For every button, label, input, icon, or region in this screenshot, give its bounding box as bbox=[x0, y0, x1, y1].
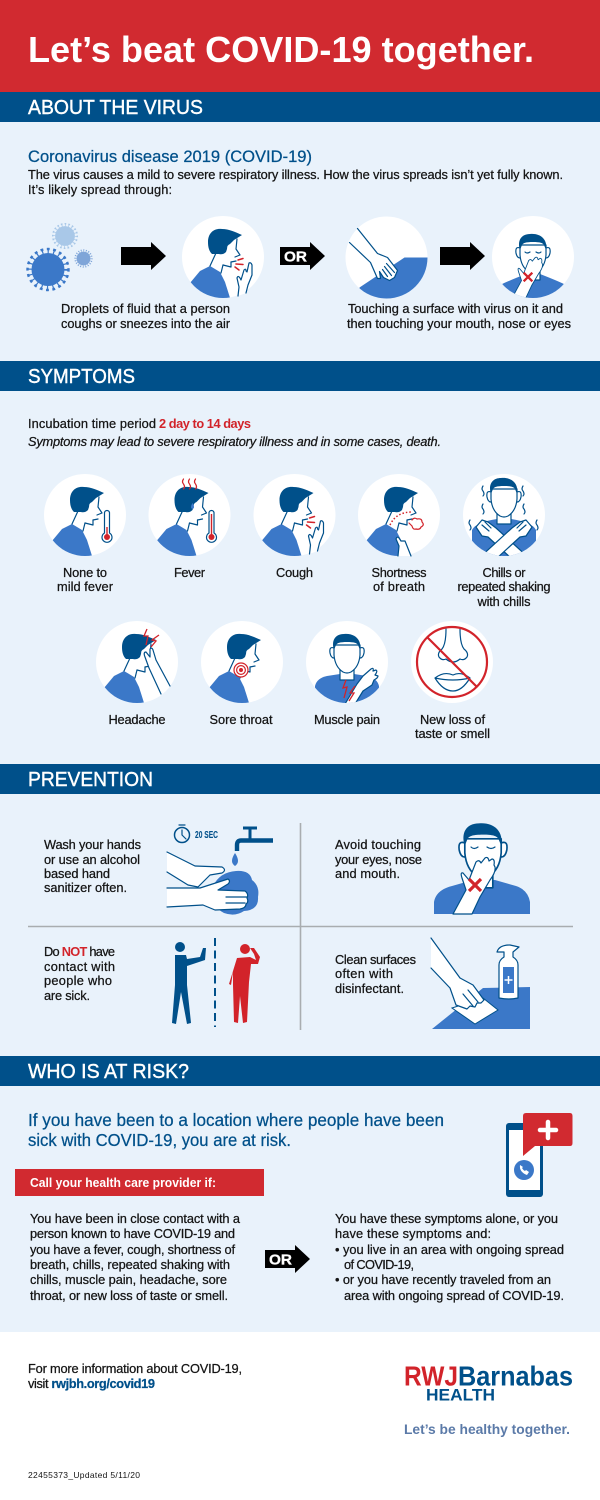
label: new loss of taste or smell bbox=[415, 712, 490, 741]
label: chills: repeated shaking bbox=[458, 579, 550, 594]
text: no contact: people who bbox=[44, 973, 112, 988]
caption: touching: then touching your mouth, nose or eyes bbox=[347, 316, 571, 331]
icon: headache bbox=[96, 621, 178, 706]
label: cough: Cough bbox=[276, 565, 313, 580]
label: new loss of taste or smell: taste or smell bbox=[415, 726, 490, 741]
callout: call your provider bbox=[15, 1169, 264, 1196]
arrow: OR: OR bbox=[269, 1252, 292, 1268]
icon: sick person bbox=[229, 944, 260, 1023]
label: sore throat: Sore throat bbox=[210, 712, 273, 727]
section header: who is at risk: WHO IS AT RISK? bbox=[28, 1061, 189, 1083]
text: clean surfaces: often with bbox=[335, 966, 393, 981]
icon: no taste or smell bbox=[411, 621, 493, 703]
title banner bbox=[0, 0, 600, 92]
section header: symptoms: SYMPTOMS bbox=[28, 366, 135, 388]
incubation period: Incubation time period bbox=[28, 416, 156, 431]
icon: cough bbox=[254, 474, 336, 559]
text: close contact bbox=[30, 1211, 241, 1303]
label: new loss of taste or smell: New loss of bbox=[420, 712, 485, 727]
logo: RWJBarnabas Health: RWJ bbox=[404, 1360, 458, 1392]
icon: spray bottle bbox=[497, 945, 519, 999]
icon: shortness of breath bbox=[358, 474, 440, 559]
label: fever: Fever bbox=[174, 565, 206, 580]
icon: washing hands bbox=[167, 825, 273, 915]
caption: droplets: coughs or sneezes into the air bbox=[61, 316, 231, 331]
icon: phone call bbox=[506, 1113, 572, 1197]
text: wash hands: or use an alcohol bbox=[44, 852, 140, 867]
label: none to mild fever: None to bbox=[63, 565, 107, 580]
title banner: Let’s beat COVID-19 together. bbox=[28, 29, 534, 70]
tagline: Let’s be healthy together. bbox=[404, 1421, 570, 1437]
icon: none to mild fever bbox=[44, 474, 126, 559]
label: shortness of breath: Shortness bbox=[372, 565, 426, 580]
text: avoid touching bbox=[335, 837, 422, 881]
text: symptoms and location: • or you have recently traveled from an bbox=[335, 1272, 551, 1287]
text: no contact bbox=[44, 944, 115, 1003]
text: symptoms and location: • you live in an area with ongoing spread bbox=[335, 1242, 564, 1257]
icon: sore throat bbox=[201, 621, 283, 706]
panel: about the virus bbox=[28, 148, 574, 331]
text: avoid touching: and mouth. bbox=[335, 866, 400, 881]
subheading: disease name: Coronavirus disease 2019 (COVID-19) bbox=[28, 148, 312, 166]
risk statement: sick with COVID-19, you are at risk. bbox=[28, 1130, 291, 1150]
arrow: OR bbox=[280, 242, 325, 270]
section header: prevention: PREVENTION bbox=[28, 769, 153, 791]
label: chills: with chills bbox=[476, 594, 530, 609]
label: none to mild fever: mild fever bbox=[57, 579, 114, 594]
text: close contact: person known to have COVID-19 and bbox=[30, 1226, 235, 1241]
text: clean surfaces: disinfectant. bbox=[335, 981, 404, 996]
section header: about the virus: ABOUT THE VIRUS bbox=[28, 97, 203, 119]
incubation period: 2 day to 14 days bbox=[159, 416, 251, 431]
text: clean surfaces: Clean surfaces bbox=[335, 952, 416, 967]
label: headache: Headache bbox=[108, 712, 166, 727]
label: chills bbox=[458, 565, 550, 609]
caption: touching: Touching a surface with virus on it and bbox=[348, 301, 563, 316]
incubation period bbox=[28, 416, 251, 431]
footer: more information bbox=[28, 1361, 242, 1391]
text: close contact: throat, or new loss of taste or smell. bbox=[30, 1288, 228, 1303]
text: wash hands bbox=[44, 837, 141, 895]
text: close contact: chills, muscle pain, headache, sore bbox=[30, 1272, 227, 1287]
icon: healthy person bbox=[172, 942, 206, 1024]
text: close contact: you have a fever, cough, shortness of bbox=[30, 1242, 235, 1257]
icon: keep distance bbox=[172, 938, 260, 1027]
icon: touching face bbox=[492, 216, 574, 301]
section header: about the virus bbox=[0, 92, 600, 122]
icon: timer: 20 SEC bbox=[195, 830, 218, 841]
intro text: It’s likely spread through: bbox=[28, 182, 172, 197]
text: avoid touching: your eyes, nose bbox=[335, 852, 422, 867]
severity note: Symptoms may lead to severe respiratory illness and in some cases, death. bbox=[28, 434, 441, 449]
icon: cleaning surface bbox=[431, 938, 530, 1029]
text: wash hands: Wash your hands bbox=[44, 837, 141, 852]
text: symptoms and location: of COVID-19, bbox=[344, 1257, 414, 1272]
risk statement: If you have been to a location where people have been bbox=[28, 1110, 444, 1130]
icon: soap foam bbox=[213, 871, 258, 915]
footer: more information: For more information about COVID-19, bbox=[28, 1361, 242, 1376]
caption: touching bbox=[347, 301, 571, 331]
label: shortness of breath: of breath bbox=[373, 579, 425, 594]
arrow: OR bbox=[265, 1245, 310, 1273]
text: close contact: You have been in close contact with a bbox=[30, 1211, 241, 1226]
intro text bbox=[28, 167, 563, 197]
label: muscle pain: Muscle pain bbox=[314, 712, 380, 727]
footer: more information: visit rwjbh.org/covid19 bbox=[28, 1376, 155, 1391]
icon: avoid touching face bbox=[434, 823, 530, 914]
panel: symptoms bbox=[28, 416, 550, 741]
text: wash hands: sanitizer often. bbox=[44, 880, 127, 895]
logo: RWJBarnabas Health: Barnabas bbox=[458, 1360, 573, 1392]
text: close contact: breath, chills, repeated shaking with bbox=[30, 1257, 230, 1272]
icon: faucet bbox=[237, 828, 273, 851]
text: no contact: contact with bbox=[44, 959, 115, 974]
arrow: OR: OR bbox=[284, 248, 307, 266]
logo: RWJBarnabas Health: HEALTH bbox=[426, 1386, 495, 1404]
section header: who is at risk bbox=[0, 1056, 600, 1086]
document code: 22455373_Updated 5/11/20 bbox=[28, 1470, 140, 1480]
text: symptoms and location bbox=[335, 1211, 564, 1303]
text: no contact: are sick. bbox=[44, 988, 90, 1003]
section header: symptoms bbox=[0, 361, 600, 391]
text: clean surfaces bbox=[335, 952, 416, 996]
callout: call your provider: Call your health care provider if: bbox=[30, 1175, 216, 1190]
logo: RWJBarnabas Health bbox=[404, 1360, 573, 1404]
text: symptoms and location: area with ongoing spread of COVID-19. bbox=[344, 1288, 564, 1303]
panel: who is at risk bbox=[15, 1110, 572, 1303]
text: avoid touching: Avoid touching bbox=[335, 837, 421, 852]
caption: droplets bbox=[61, 301, 231, 331]
icon: chills bbox=[463, 474, 545, 559]
icon: hand touching surface bbox=[346, 216, 428, 300]
panel: prevention bbox=[28, 823, 573, 1030]
text: no contact: Do NOT have bbox=[44, 944, 115, 959]
text: symptoms and location: have these symptoms and: bbox=[335, 1226, 491, 1241]
caption: droplets: Droplets of fluid that a person bbox=[61, 301, 230, 316]
section header: prevention bbox=[0, 764, 600, 794]
icon: person coughing bbox=[182, 216, 264, 301]
icon: virus particles bbox=[28, 224, 92, 290]
arrow: to face bbox=[440, 242, 485, 270]
arrow: to cough bbox=[121, 242, 166, 270]
label: shortness of breath bbox=[372, 565, 426, 594]
icon: muscle pain bbox=[306, 621, 388, 706]
text: wash hands: based hand bbox=[44, 866, 110, 881]
text: symptoms and location: You have these symptoms alone, or you bbox=[335, 1211, 558, 1226]
label: chills: Chills or bbox=[482, 565, 526, 580]
icon: fever bbox=[148, 474, 230, 559]
intro text: The virus causes a mild to severe respiratory illness. How the virus spreads isn’t yet fully known. bbox=[28, 167, 563, 182]
risk statement bbox=[28, 1110, 444, 1150]
label: none to mild fever bbox=[57, 565, 114, 594]
icon: water drop bbox=[232, 853, 238, 866]
